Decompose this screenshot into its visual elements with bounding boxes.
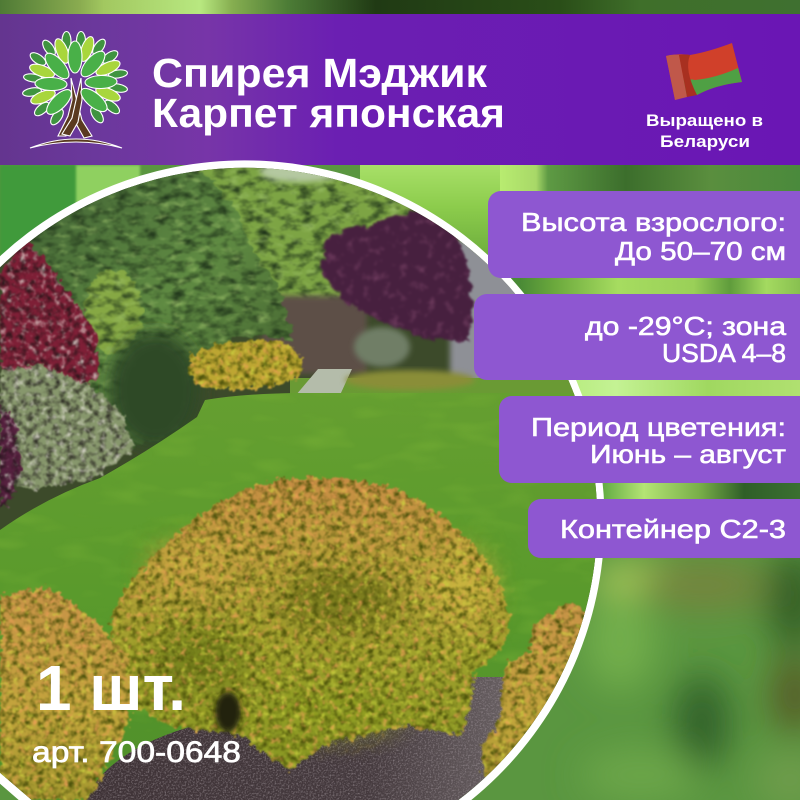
path at the back (298, 369, 352, 393)
shadow under shrub (215, 692, 241, 732)
card: hardiness: до -29°С; зона (585, 311, 787, 341)
conifer (20, 165, 292, 450)
card: hardiness: USDA 4–8 (662, 338, 786, 368)
card: container (528, 499, 800, 558)
card: flowering period (499, 396, 800, 483)
base foliage (0, 160, 620, 800)
back lawn (290, 378, 575, 396)
card: hardiness (474, 294, 800, 380)
weeping shrub (84, 270, 142, 354)
title: Спирея Мэджик (152, 50, 488, 96)
tree trunk and ground (30, 78, 122, 148)
red maple (0, 240, 98, 400)
white ring (0, 160, 605, 800)
top strip (0, 0, 800, 14)
variegated shrub (0, 365, 135, 490)
light leaves (28, 35, 122, 107)
purple shrub (0, 405, 22, 510)
yellow shrub (190, 339, 305, 390)
distant foliage (196, 168, 488, 300)
origin label: Беларуси (660, 132, 750, 151)
header band (0, 14, 800, 165)
article number: арт. 700-0648 (32, 736, 241, 769)
lawn (0, 393, 620, 800)
origin label: Выращено в (646, 111, 763, 130)
bright sky gap (258, 168, 336, 186)
low back hedge (345, 370, 475, 390)
card: flowering period: Период цветения: (531, 412, 786, 442)
title (152, 50, 505, 136)
main spirea shrub (110, 477, 510, 770)
card: height: Высота взрослого: (521, 207, 786, 237)
mid green leaves (35, 41, 117, 118)
card: flowering period: Июнь – август (590, 439, 786, 469)
left shrub (0, 587, 130, 800)
shrub shading (150, 546, 492, 732)
card: height (488, 191, 800, 278)
purple maple (322, 212, 472, 340)
right shrub (478, 602, 585, 778)
card: container: Контейнер С2-3 (560, 514, 786, 544)
logo: tree (22, 32, 128, 148)
white flowering shrub (354, 327, 410, 367)
card: height: До 50–70 см (615, 236, 786, 266)
circular garden photo (0, 160, 620, 800)
house (446, 238, 516, 378)
gravel path (85, 677, 520, 800)
dark conifer base (109, 332, 201, 448)
origin label (646, 111, 763, 151)
fence (262, 296, 367, 374)
quantity label: 1 шт. (36, 652, 186, 724)
icon: Belarus flag (666, 43, 742, 100)
outer dark leaves (22, 32, 128, 127)
title: Карпет японская (152, 90, 505, 136)
